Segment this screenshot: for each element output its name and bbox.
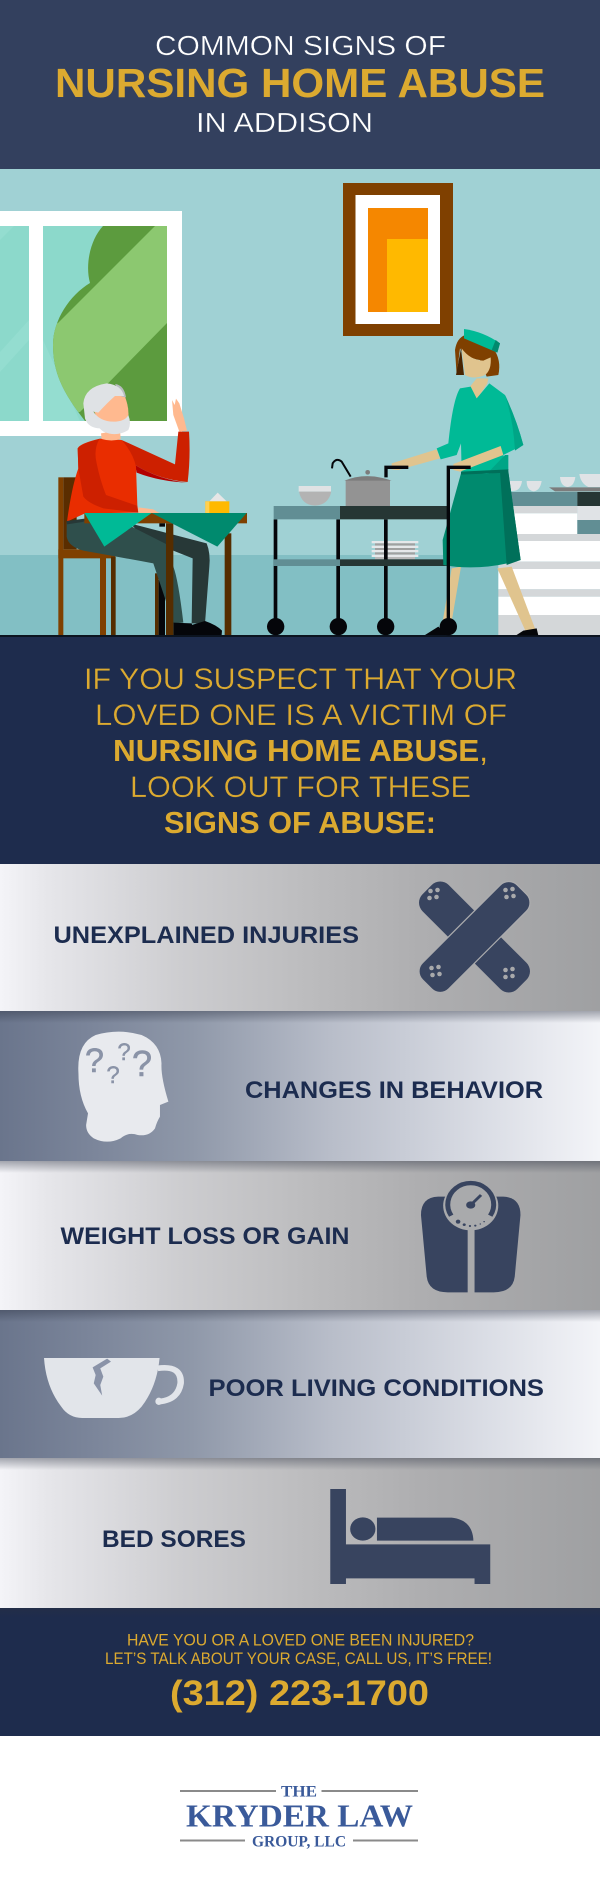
label: UNEXPLAINED INJURIES [54,922,359,949]
phone number: (312) 223-1700 [170,1674,429,1713]
floor line [0,635,600,637]
cart frame [267,506,450,635]
plates [372,541,418,559]
icon: bathroom scale [421,1181,520,1293]
banner: poor living conditions [0,1310,600,1458]
intro line 5: SIGNS OF ABUSE: [164,805,436,840]
chair [58,477,165,635]
intro line 4: LOOK OUT FOR THESE [130,771,471,804]
serving counter with dishes [498,474,600,636]
title line 1: COMMON SIGNS OF [155,30,446,61]
header panel [0,0,600,169]
neck hand and face [94,394,187,513]
cart front leg and handles [386,467,471,635]
bowl [299,486,331,506]
icon: cracked cup [44,1358,181,1418]
banner: weight loss or gain [0,1161,600,1310]
illustration: nursing home dining room [0,169,600,637]
icon: person in bed [330,1489,490,1584]
title line 2: NURSING HOME ABUSE [55,60,545,106]
intro line 3: NURSING HOME ABUSE, [113,733,488,768]
shoes [173,621,222,635]
label: POOR LIVING CONDITIONS [208,1375,544,1402]
window with tree [0,211,182,436]
logo word: the: THE [281,1784,317,1801]
table with cloth [84,513,247,635]
call to action panel [0,1608,600,1736]
intro panel [0,637,600,864]
call to action line 1: HAVE YOU OR A LOVED ONE BEEN INJURED? [127,1631,474,1650]
banner: bed sores [0,1458,600,1608]
banner: unexplained injuries [0,864,600,1011]
intro line 1: IF YOU SUSPECT THAT YOUR [84,663,517,696]
pot with ladle [332,460,392,506]
napkin holder [205,493,229,513]
food cart and nurse [267,329,538,635]
icon: head with question marks [78,1032,168,1142]
man seated at table [58,383,247,635]
logo word: group llc: GROUP, LLC [252,1834,346,1851]
near leg [67,522,183,623]
label: WEIGHT LOSS OR GAIN [60,1223,350,1250]
title line 3: IN ADDISON [196,107,373,138]
wall picture [343,183,453,336]
icon: head with question marks: ? [132,1043,152,1084]
label: BED SORES [102,1526,246,1553]
label: CHANGES IN BEHAVIOR [245,1077,543,1104]
wall and floor [0,169,600,635]
icon: crossed bandages [414,877,535,997]
logo: The Kryder Law Group, LLC [0,1736,600,1895]
icon: head with question marks: ? [106,1062,120,1089]
intro line 2: LOVED ONE IS A VICTIM OF [95,699,507,732]
nurse [392,329,538,635]
torso and arm [67,432,190,524]
call to action line 2: LET’S TALK ABOUT YOUR CASE, CALL US, IT’S FREE! [105,1649,492,1668]
banner: changes in behavior [0,1011,600,1161]
logo word: kryder law: KRYDER LAW [186,1798,413,1834]
hair and beard [83,383,130,434]
far leg [130,523,210,623]
icon: head with question marks: ? [117,1039,131,1066]
icon: head with question marks: ? [85,1042,104,1080]
